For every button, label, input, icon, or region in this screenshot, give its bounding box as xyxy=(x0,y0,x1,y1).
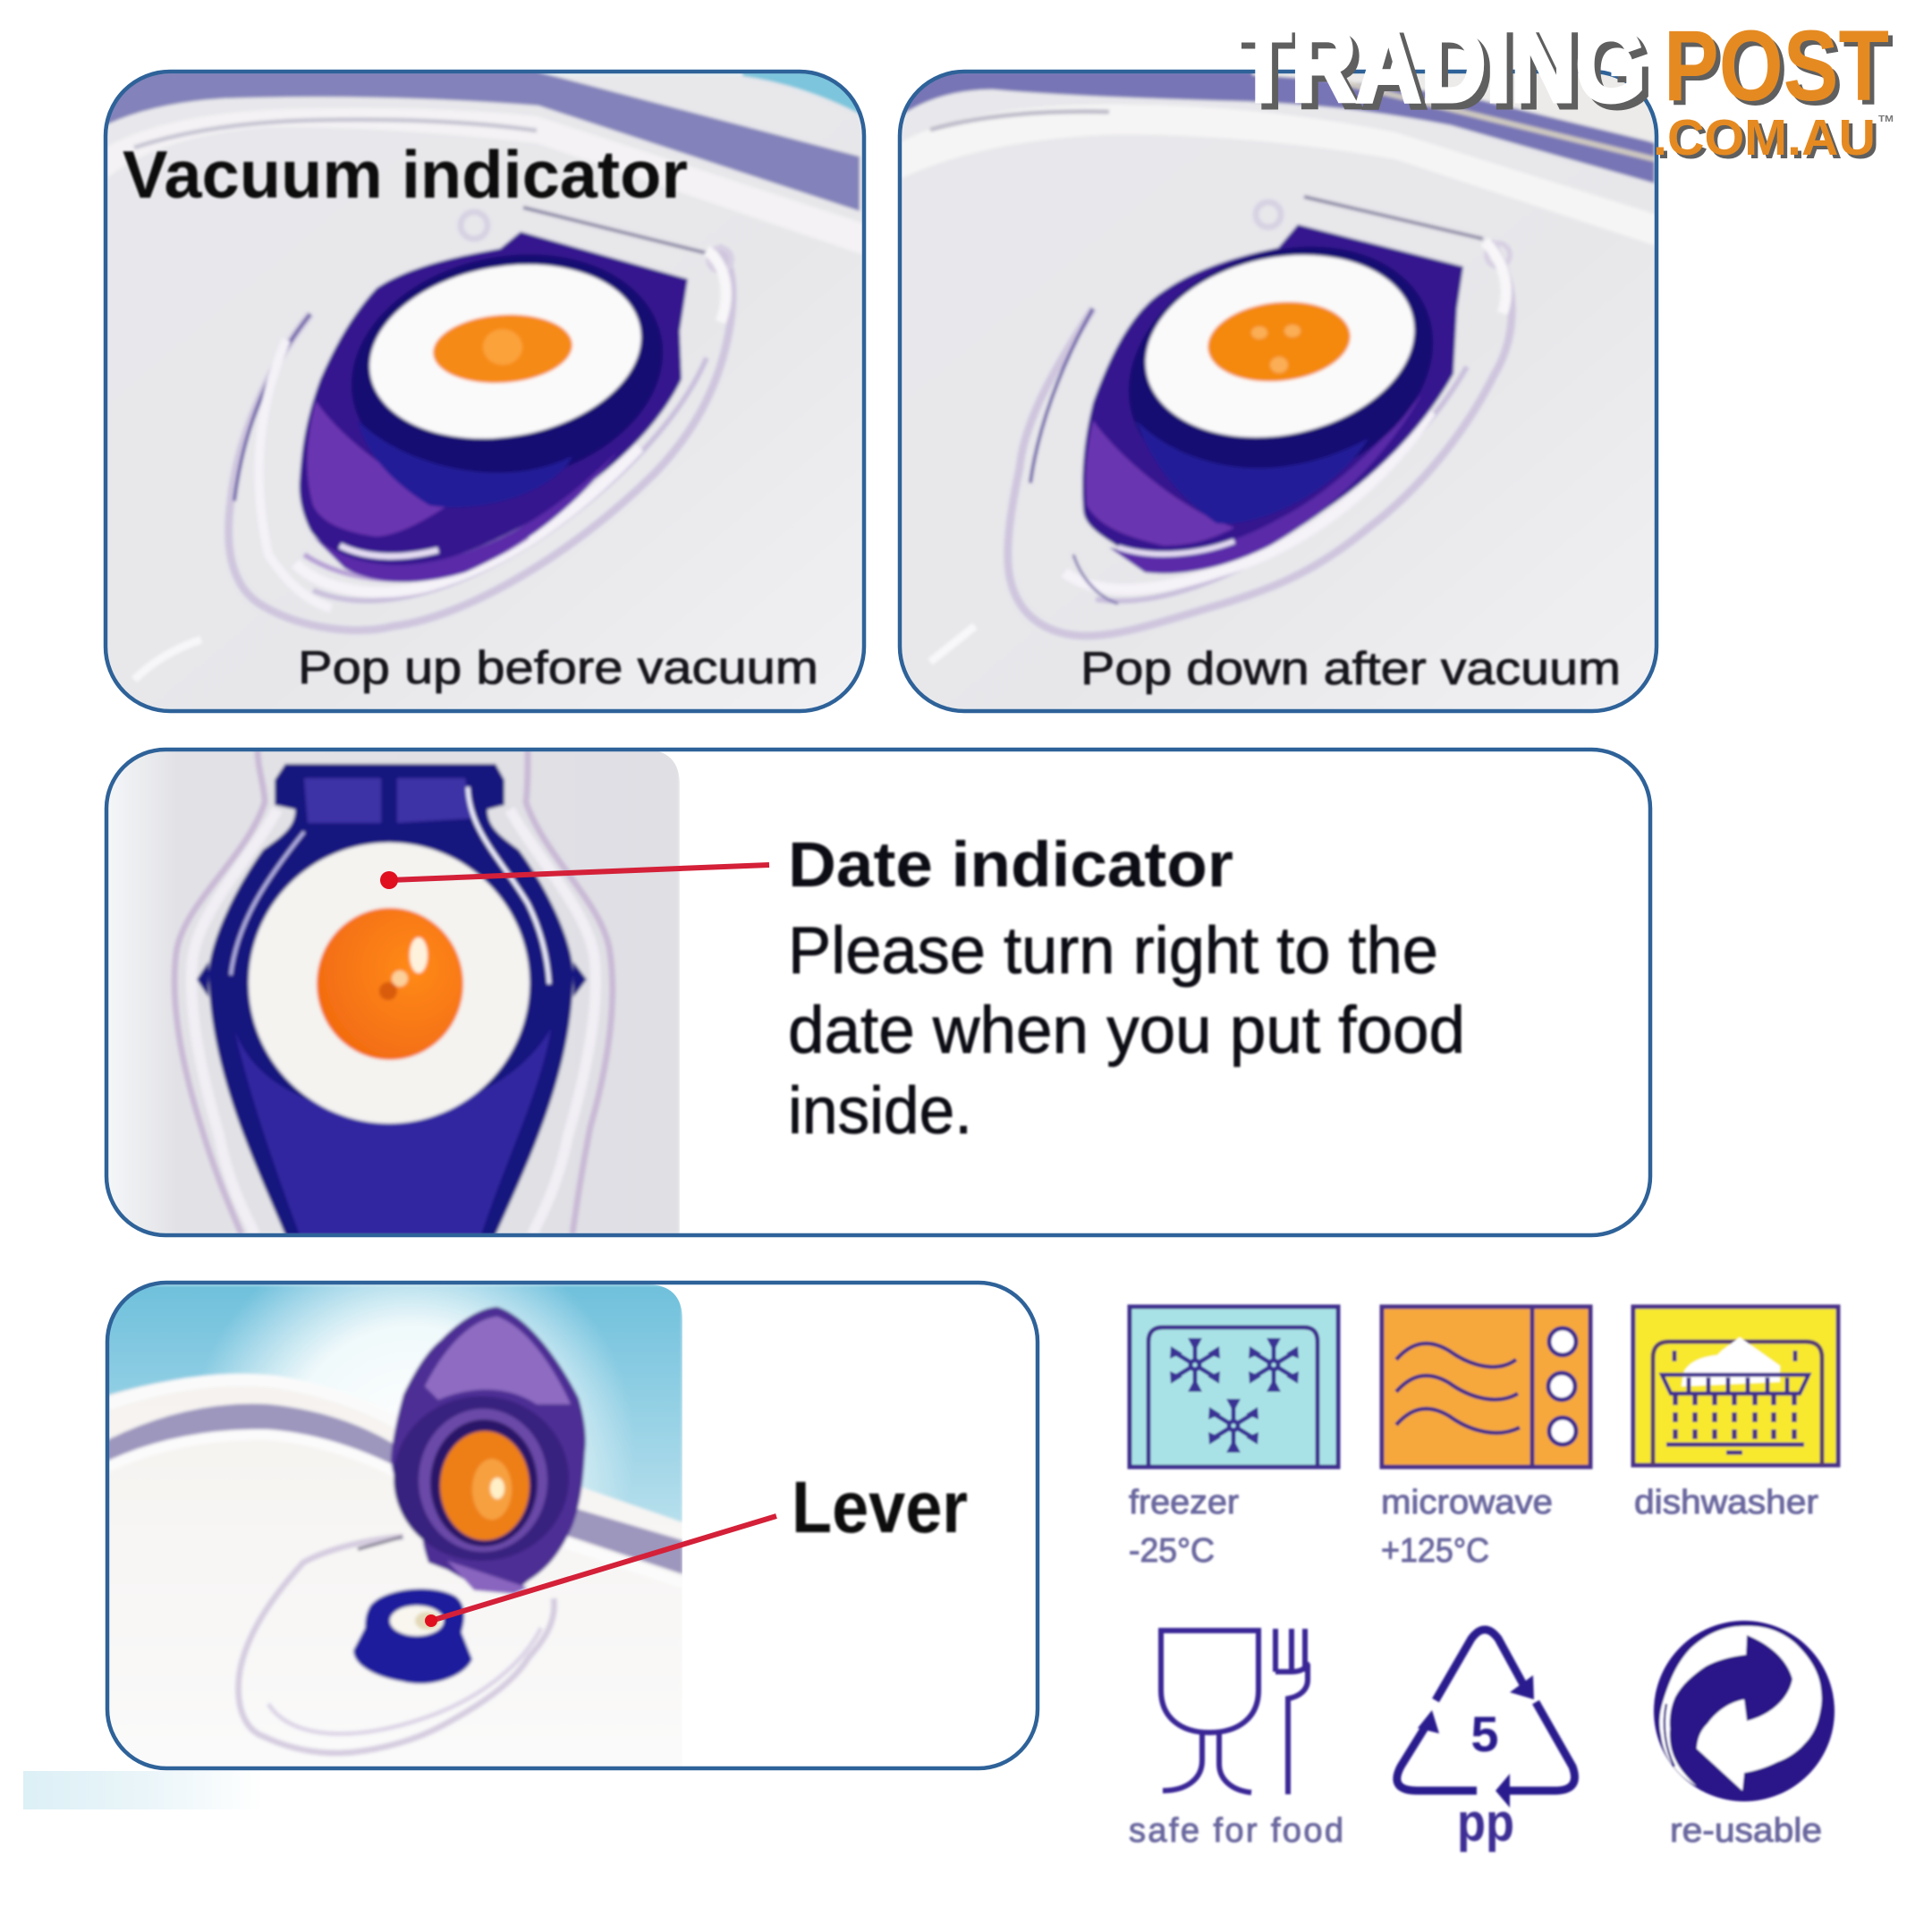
icon: re-usable green dot xyxy=(1654,1621,1835,1801)
text: date indicator: date when you put food xyxy=(788,993,1465,1067)
panel: vacuum indicator pop down xyxy=(900,72,1657,711)
orange yolk xyxy=(431,310,574,387)
illustration: open lid and lever xyxy=(107,1284,682,1767)
panel: lever xyxy=(107,1283,1038,1768)
egg white disc xyxy=(366,261,645,442)
decorative pale teal strip xyxy=(23,1771,265,1809)
label: freezer temperature: -25°C xyxy=(1129,1532,1215,1570)
clear lid outline xyxy=(239,1537,555,1753)
logo: tradingpost.com.au: POST xyxy=(1664,10,1889,122)
label: re-usable: re-usable xyxy=(1670,1812,1822,1850)
logo: tradingpost.com.au: .COM.AU xyxy=(1653,109,1876,166)
heading: lever: Lever xyxy=(792,1467,968,1548)
heading: vacuum indicator: Vacuum indicator xyxy=(123,137,688,212)
caption: pop down: Pop down after vacuum xyxy=(1080,643,1621,695)
panel: vacuum indicator pop up xyxy=(106,72,864,711)
text: date indicator: inside. xyxy=(788,1073,972,1148)
logo: tradingpost.com.au: TRADING xyxy=(1236,6,1646,124)
label: dishwasher: dishwasher xyxy=(1634,1484,1818,1521)
orange yolk xyxy=(1206,300,1352,384)
leader line: date xyxy=(380,865,769,889)
logo: tradingpost.com.au: .COM.AU xyxy=(1657,113,1879,170)
egg white disc xyxy=(1141,251,1419,441)
orange button xyxy=(440,1431,530,1540)
blue lever knob xyxy=(353,1589,472,1683)
white date disc xyxy=(249,843,530,1123)
label: microwave temperature: +125°C xyxy=(1381,1532,1489,1570)
illustration: date dial xyxy=(107,750,680,1235)
navy body xyxy=(208,764,573,1235)
icon: freezer xyxy=(1130,1307,1338,1467)
text: date indicator: Date indicator xyxy=(788,830,1233,901)
label: freezer: freezer xyxy=(1129,1484,1239,1521)
logo: tradingpost.com.au xyxy=(1236,6,1894,170)
caption: pop up: Pop up before vacuum xyxy=(298,642,818,694)
purple hinged cap xyxy=(391,1307,586,1592)
panel: date indicator xyxy=(106,750,1650,1235)
icon: dishwasher xyxy=(1633,1307,1838,1465)
label: safe for food: safe for food xyxy=(1129,1812,1343,1850)
text: date indicator xyxy=(788,830,1465,1148)
logo: tradingpost.com.au: TRADING xyxy=(1242,13,1652,131)
number 5: 5 xyxy=(1470,1706,1499,1762)
orange button xyxy=(317,908,463,1060)
text: date indicator: Please turn right to the xyxy=(788,913,1438,987)
icon group: usage and material symbols xyxy=(1129,1307,1838,1852)
leader line: lever xyxy=(425,1516,776,1627)
icon: recycling 5 pp xyxy=(1397,1630,1574,1808)
label: pp: pp xyxy=(1457,1792,1514,1852)
logo: tradingpost.com.au: TM xyxy=(1878,114,1894,124)
label: microwave: microwave xyxy=(1381,1484,1553,1521)
icon: safe for food xyxy=(1161,1629,1308,1794)
purple body xyxy=(1082,225,1463,566)
purple body xyxy=(300,232,688,570)
icon: microwave xyxy=(1382,1307,1590,1467)
